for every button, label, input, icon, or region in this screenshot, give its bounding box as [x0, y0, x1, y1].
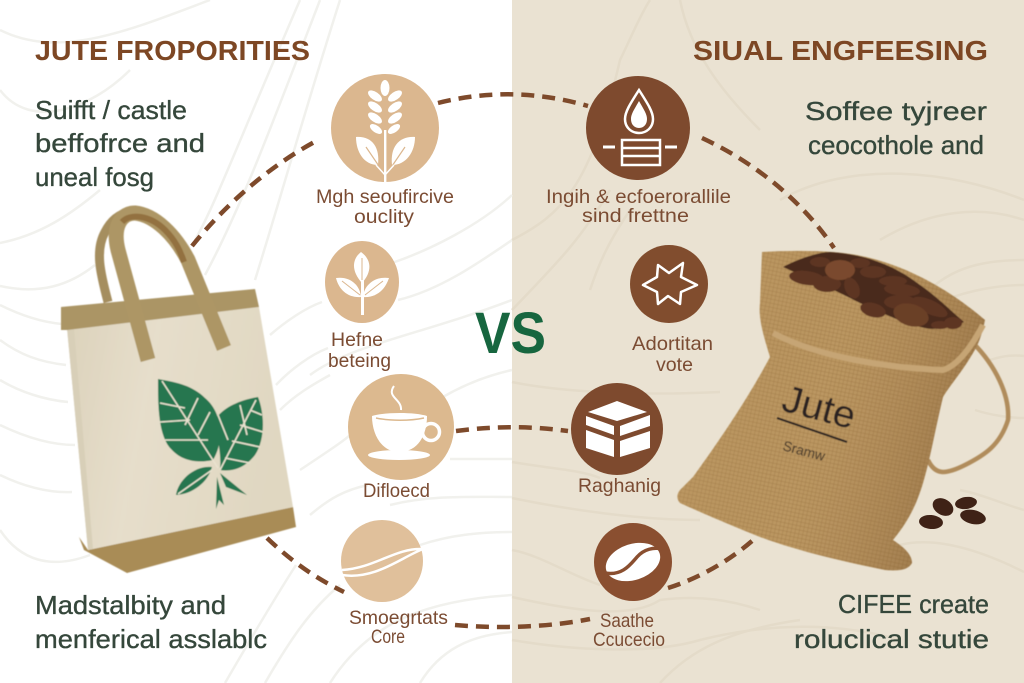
- label: box: Raghanig: [578, 475, 661, 497]
- bag bottom: [79, 507, 296, 573]
- label: sprout: [328, 329, 391, 372]
- arrow: cup to box: [456, 427, 568, 431]
- label: wheat: Mgh seoufircive: [316, 186, 454, 208]
- bag top band: [61, 289, 259, 330]
- sack small print: Sramw: [781, 437, 828, 464]
- label: star knot: vote: [656, 354, 693, 376]
- label: sprout: beteing: [328, 350, 391, 372]
- label: drop and box: sind frettne: [582, 205, 689, 227]
- icon: wheat: [331, 74, 439, 186]
- background: right panel: [512, 0, 1024, 683]
- title: jute properties: JUTE FROPORITIES: [35, 35, 310, 66]
- title: visual engineering: SIUAL ENGFEESING: [693, 35, 988, 66]
- text block: top left: [35, 95, 205, 192]
- sack rope band: [773, 325, 983, 370]
- jute sack with coffee beans: [677, 251, 1008, 570]
- jute tote bag: [61, 211, 296, 573]
- bag back handle: [99, 211, 135, 302]
- text block: bottom left: Madstalbity and: [35, 590, 226, 620]
- icon: box: [571, 383, 663, 475]
- sack beans: [788, 257, 962, 331]
- sack printed word: Jute: [778, 378, 860, 438]
- text block: top left: uneal fosg: [35, 162, 154, 192]
- text block: bottom right: [794, 589, 989, 654]
- label: coffee bean: Ccucecio: [593, 629, 665, 651]
- text block: bottom left: [35, 590, 267, 654]
- arrow: bag to wave: [267, 538, 344, 592]
- bag side fold: [67, 328, 93, 550]
- sack shading: [677, 251, 985, 570]
- arrow: wheat to drop: [438, 94, 588, 106]
- text block: top right: [805, 96, 987, 160]
- label: coffee cup: Difloecd: [363, 480, 430, 502]
- arrow: core to sauce: [455, 619, 590, 627]
- icon: drop and box: [586, 76, 690, 180]
- sack rope loop: [928, 343, 1008, 472]
- label: star knot: Adortitan: [632, 333, 713, 355]
- icon: coffee bean: [594, 523, 672, 601]
- text block: bottom right: roluclical stutie: [794, 624, 989, 654]
- arrow: bean to sack: [668, 541, 752, 588]
- loose coffee beans: [918, 495, 987, 530]
- text block: top left: beffofrce and: [35, 128, 205, 158]
- label: coffee bean: Saathe: [600, 610, 654, 632]
- icon: wave: [341, 520, 423, 602]
- sack underline: [777, 418, 847, 442]
- icon: sprout: [325, 241, 399, 323]
- background: left panel: [0, 0, 512, 683]
- sack opening: [783, 252, 964, 329]
- bag leaf logo: [158, 379, 263, 509]
- icon: coffee cup: [348, 374, 454, 480]
- label: wave: Smoegrtats: [349, 607, 448, 629]
- text block: top right: ceocothole and: [808, 130, 984, 160]
- bag front handle: [116, 213, 224, 360]
- label: sprout: Hefne: [331, 329, 383, 351]
- text block: bottom right: CIFEE create: [838, 589, 989, 619]
- label: wheat: ouclity: [354, 206, 414, 228]
- label: wheat: [316, 186, 454, 228]
- label: drop and box: Ingih & ecfoerorallile: [546, 186, 731, 208]
- label: star knot: [632, 333, 713, 376]
- label: coffee bean: [593, 610, 665, 651]
- label: drop and box: [546, 186, 731, 227]
- arrow: bag to wheat: [192, 139, 320, 246]
- sack body: [677, 251, 985, 570]
- vs heading: VS: [475, 301, 546, 366]
- bag body: [67, 307, 293, 550]
- text block: bottom left: menferical asslablc: [35, 624, 267, 654]
- text block: top right: Soffee tyjreer: [805, 96, 987, 126]
- label: wave: [349, 607, 448, 648]
- label: wave: Core: [371, 626, 405, 648]
- arrow: drop to sack: [702, 138, 834, 248]
- icon: star knot: [630, 245, 708, 323]
- text block: top left: Suifft / castle: [35, 95, 187, 125]
